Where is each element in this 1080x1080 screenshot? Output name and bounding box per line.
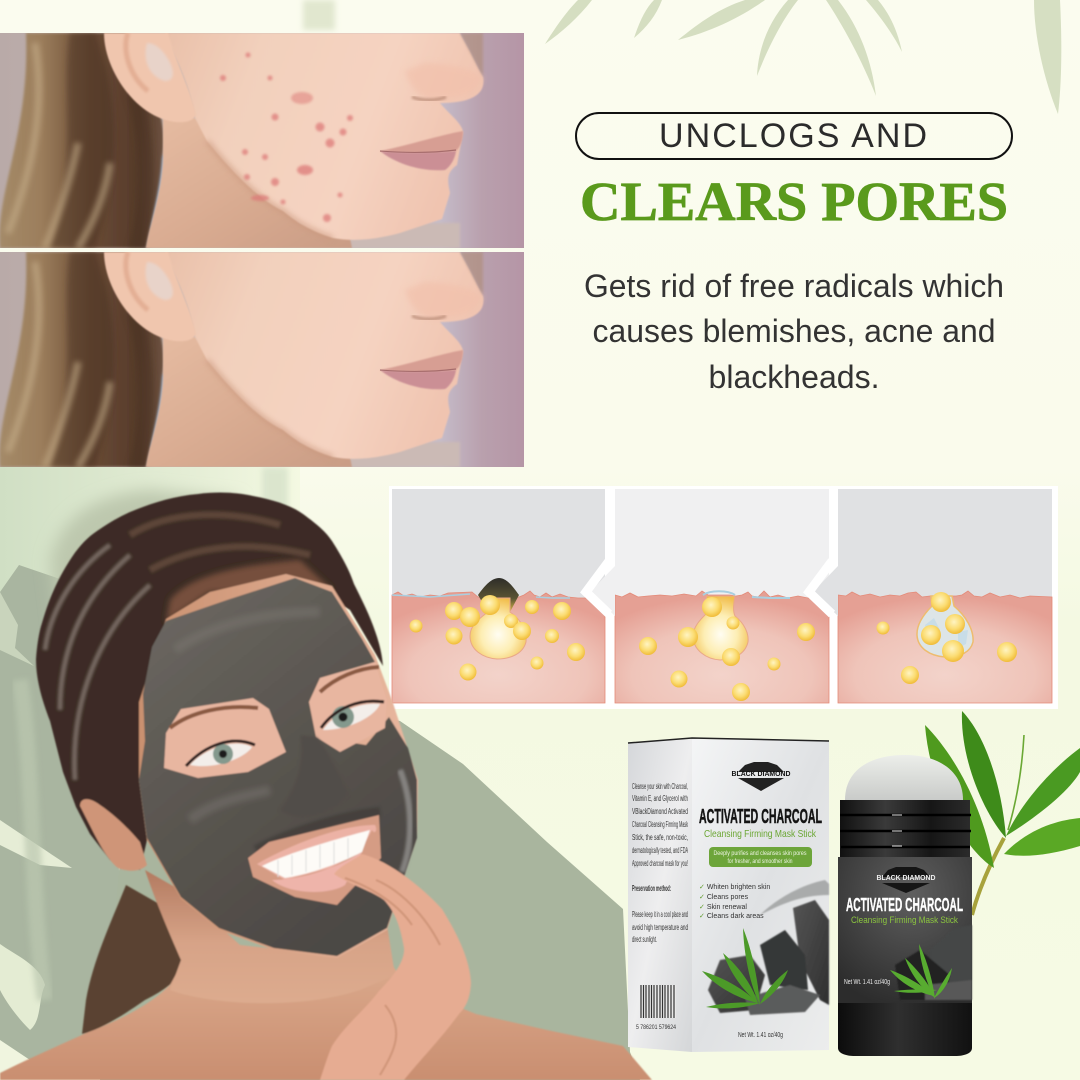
product: charcoal mask box: Please keep it in a cool place and	[632, 910, 688, 919]
side panel text: Vitamin E, and Glycerol with	[632, 794, 688, 803]
stick label	[838, 857, 972, 1003]
product: charcoal mask box: dermatologically tested, and FDA	[632, 846, 688, 855]
box bamboo sprig	[702, 928, 788, 1008]
background: grey-green brush shapes	[0, 490, 640, 1080]
body text: causes blemishes, acne and	[592, 313, 996, 349]
acne spots	[220, 52, 353, 222]
decoration: vivid bamboo leaves	[925, 711, 1080, 915]
box product title: ACTIVATED CHARCOAL	[699, 806, 822, 828]
product: mask stick	[838, 755, 972, 1056]
box benefits list: ✓ Cleans dark areas	[699, 913, 764, 920]
hand	[320, 854, 471, 1080]
nose shadow	[280, 735, 349, 817]
heading: clears pores: CLEARS PORES	[580, 171, 1008, 232]
body text: Gets rid of free radicals which	[584, 268, 1004, 304]
charcoal mask	[139, 578, 417, 956]
heading pill: unclogs and	[576, 113, 1012, 159]
background: pale lower-left wash	[0, 0, 335, 760]
box charcoal rocks	[708, 880, 829, 1015]
logo: black diamond on box: BLACK DIAMOND	[732, 769, 791, 778]
side panel text: direct sunlight.	[632, 935, 657, 944]
shoulders	[0, 955, 652, 1080]
stick black ribbed collar	[840, 800, 971, 860]
ear	[80, 799, 147, 871]
heading pill: unclogs and: UNCLOGS AND	[659, 117, 927, 155]
decoration: pale bamboo leaves top right	[545, 0, 1061, 114]
side panel text	[632, 782, 688, 944]
box subtitle: Cleansing Firming Mask Stick	[704, 828, 817, 840]
box benefits list: ✓ Cleans pores	[699, 894, 749, 901]
box front panel	[692, 739, 829, 1052]
box benefits list	[699, 884, 770, 920]
product: charcoal mask box: Cleanse your skin with Charcoal,	[632, 782, 688, 791]
box side panel	[628, 739, 692, 1052]
stick charcoal rocks	[895, 925, 972, 1000]
box green callout: Deeply purifies and cleanses skin pores	[714, 851, 806, 857]
box green callout: for fresher, and smoother skin	[728, 859, 792, 865]
photo: skin before, with acne	[0, 33, 524, 248]
mouth	[248, 812, 381, 905]
hair ponytail	[82, 885, 185, 1034]
box green callout	[709, 847, 812, 867]
body text	[584, 268, 1004, 395]
woman with charcoal mask	[0, 493, 652, 1080]
stick subtitle: Cleansing Firming Mask Stick	[851, 915, 958, 926]
stick title: ACTIVATED CHARCOAL	[846, 895, 963, 915]
logo: black diamond on stick	[876, 867, 936, 893]
logo: black diamond on box	[732, 762, 791, 791]
barcode	[636, 985, 677, 1031]
logo: black diamond on stick: BLACK DIAMOND	[876, 873, 936, 882]
box top edge	[628, 738, 829, 743]
product: charcoal mask box	[628, 738, 829, 1052]
barcode: 5 786201 579624	[636, 1025, 677, 1031]
side panel text: VBlackDiamond Activated	[632, 807, 688, 816]
box benefits list: ✓ Skin renewal	[699, 904, 747, 911]
stick white dome	[845, 755, 963, 800]
photo: skin after, clear	[0, 252, 524, 467]
side panel text: Preservation method:	[632, 884, 671, 893]
right eye patch	[309, 662, 387, 752]
arrow: stage 1 to 2	[586, 561, 615, 616]
box benefits list: ✓ Whiten brighten skin	[699, 884, 770, 891]
stick bamboo sprig	[890, 944, 952, 999]
stick net weight: Net Wt. 1.41 oz/40g	[844, 979, 890, 986]
diagram: three-stage pore cleansing	[389, 486, 1058, 709]
stick black cap	[838, 1003, 972, 1056]
stage 1: clogged pore	[392, 489, 605, 703]
box net weight: Net Wt. 1.41 oz/40g	[738, 1032, 783, 1039]
neck	[145, 870, 395, 1003]
product: charcoal mask box: Charcoal Cleansing Firming Mask	[632, 820, 688, 829]
stage 3: cleared pore	[838, 489, 1052, 703]
product: charcoal mask box: Approved charcoal mask for you!	[632, 859, 688, 868]
arrow: stage 2 to 3	[809, 561, 838, 616]
stage 2: opening pore	[615, 489, 829, 703]
side panel text: Stick, the safe, non-toxic,	[632, 833, 688, 842]
side panel text: avoid high temperature and	[632, 923, 688, 932]
body text: blackheads.	[708, 359, 880, 395]
hair	[36, 493, 383, 870]
face skin	[139, 574, 418, 958]
left eye patch	[164, 698, 286, 778]
